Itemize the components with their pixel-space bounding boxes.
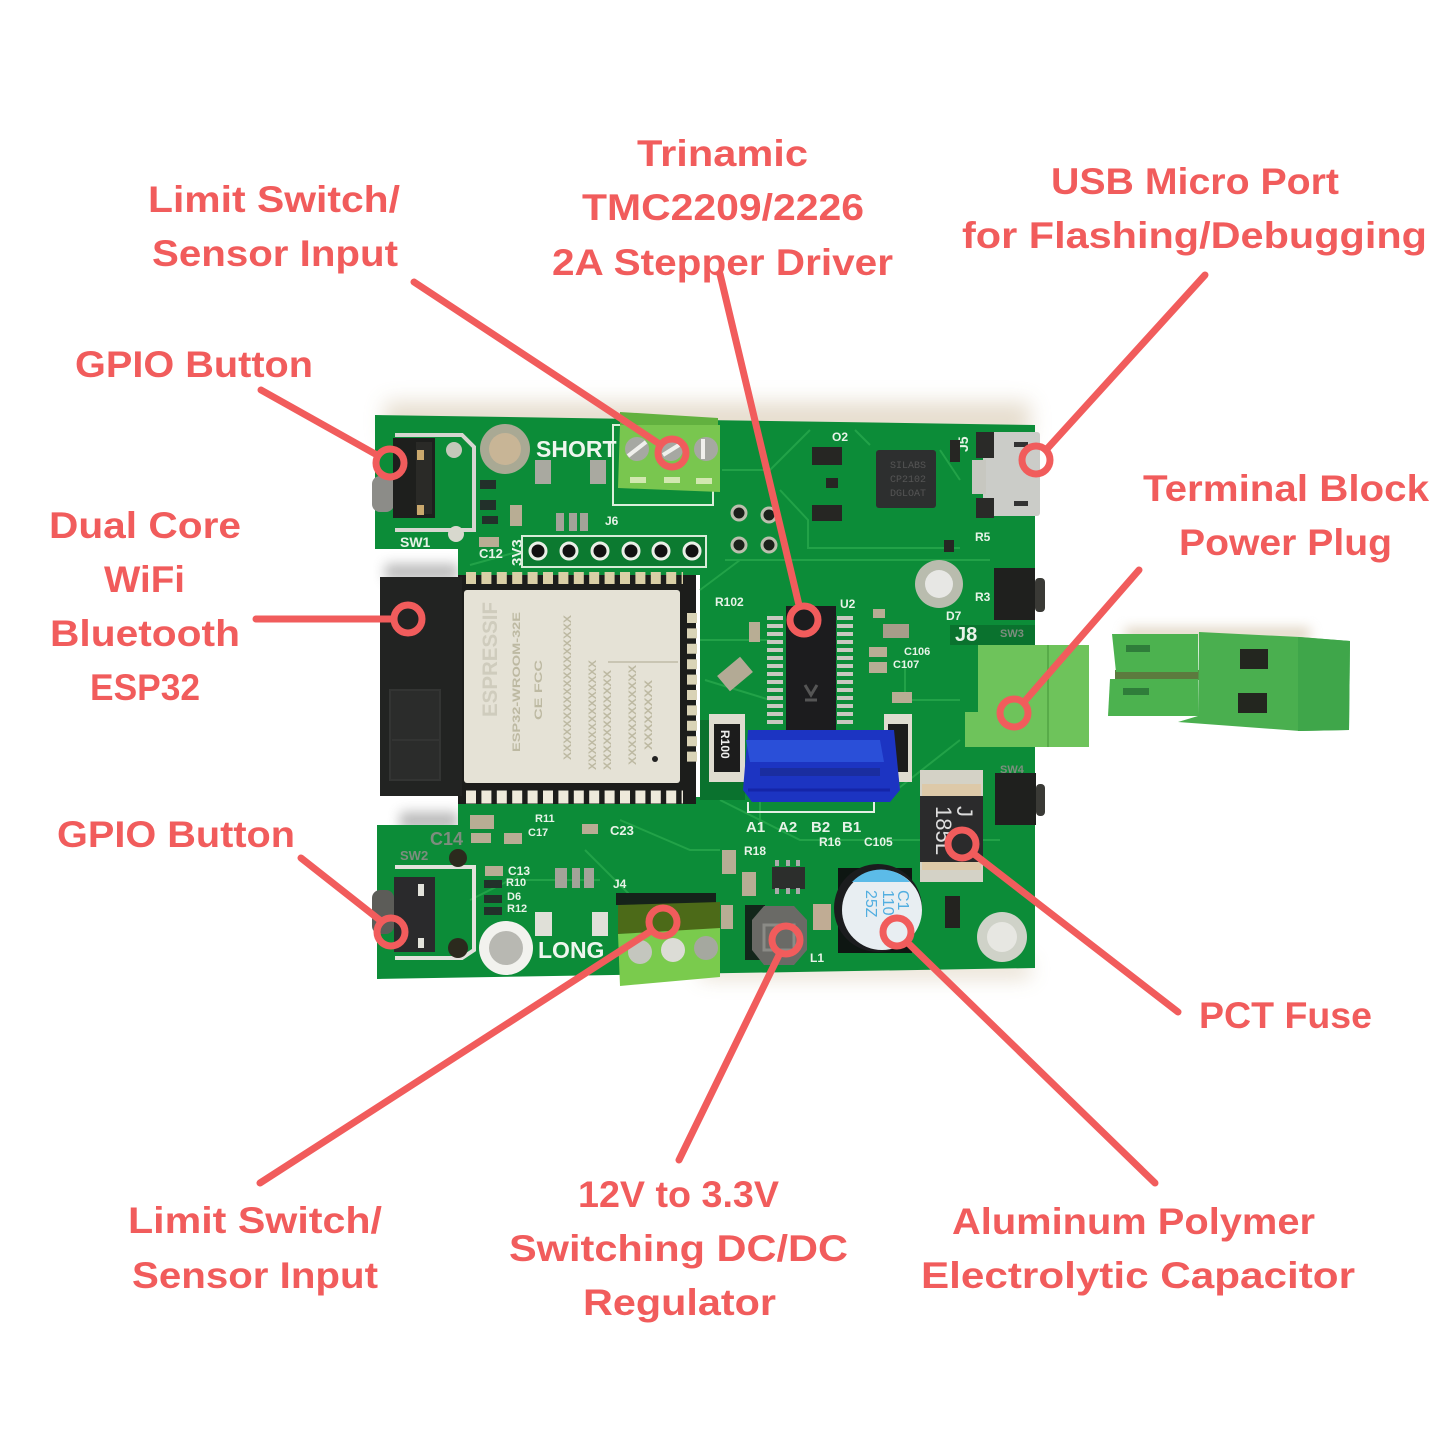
ESP32 module can: XXXXXXXXXXXXXX xyxy=(587,659,599,770)
callout: GPIO Button top xyxy=(75,344,404,477)
small smd parts xyxy=(470,460,608,936)
callout: Trinamic driver xyxy=(552,133,893,634)
callout: USB Micro Port: for Flashing/Debugging xyxy=(962,215,1427,256)
notch shadows xyxy=(385,564,458,830)
ESP32 module can: ESP32-WROOM-32E xyxy=(511,612,523,752)
ESP32 module black base xyxy=(458,575,696,804)
callout: PCT Fuse xyxy=(948,830,1372,1036)
silkscreen labels: R5 xyxy=(975,530,991,544)
silkscreen labels: R11 xyxy=(535,813,555,825)
silkscreen labels: 3V3 xyxy=(509,539,526,566)
QFN USB bridge chip: CP2102 xyxy=(890,475,926,486)
copper traces xyxy=(470,430,1000,905)
silkscreen labels: R3 xyxy=(975,590,991,604)
silkscreen labels: J8 xyxy=(955,624,977,646)
silkscreen labels: R18 xyxy=(744,844,766,858)
silkscreen labels: C107 xyxy=(893,659,919,671)
ESP32 module can: XXXXXXXX xyxy=(643,679,655,750)
silkscreen labels: J4 xyxy=(613,877,627,891)
silkscreen labels: B1 xyxy=(842,819,861,836)
callout: Trinamic driver: 2A Stepper Driver xyxy=(552,242,893,283)
ESP32 antenna area xyxy=(380,577,462,796)
QFN USB bridge chip xyxy=(876,450,936,508)
callout: Limit Switch top: Limit Switch/ xyxy=(148,179,400,220)
silkscreen labels: SW2 xyxy=(400,848,428,863)
callout: Terminal Block: Terminal Block xyxy=(1143,468,1429,509)
callout: Limit Switch bottom xyxy=(128,908,677,1296)
TMC stepper driver chip xyxy=(775,606,845,730)
aluminum capacitor: C1 xyxy=(894,890,911,911)
silkscreen labels: U2 xyxy=(840,597,856,611)
PCT fuse: 185L xyxy=(931,806,956,855)
green screw terminal J8 xyxy=(965,645,1089,747)
silkscreen labels: C23 xyxy=(610,823,634,838)
silkscreen labels: SW4 xyxy=(1000,764,1025,776)
bottom limit switch terminal xyxy=(616,893,720,986)
silkscreen labels: D6 xyxy=(507,891,521,903)
silkscreen labels: SW3 xyxy=(1000,628,1024,640)
PCT fuse: J xyxy=(952,806,977,817)
callout: Capacitor xyxy=(883,918,1355,1296)
callout: Limit Switch bottom: Limit Switch/ xyxy=(128,1200,382,1241)
callout: Dual Core ESP32: ESP32 xyxy=(90,667,200,708)
ESP32 castellated pads xyxy=(466,578,692,797)
silkscreen labels: C12 xyxy=(479,546,503,561)
silkscreen labels: J6 xyxy=(605,514,619,528)
silkscreen labels: C105 xyxy=(864,835,893,849)
callout: Capacitor: Electrolytic Capacitor xyxy=(921,1255,1355,1296)
callout: GPIO Button top: GPIO Button xyxy=(75,344,313,385)
side buttons xyxy=(994,568,1045,825)
silkscreen labels: C106 xyxy=(904,646,930,658)
regulator chips xyxy=(721,850,960,930)
silkscreen labels: C17 xyxy=(528,827,548,839)
silkscreen labels: J5 xyxy=(955,436,971,452)
aluminum capacitor xyxy=(834,864,922,953)
passive components around driver: R100 xyxy=(718,730,732,759)
callout: GPIO Button bottom: GPIO Button xyxy=(57,814,295,855)
transistors xyxy=(812,440,960,552)
QFN USB bridge chip: DGLOAT xyxy=(890,489,926,500)
silkscreen labels: SHORT xyxy=(536,436,616,462)
callout: Terminal Block xyxy=(1000,468,1429,727)
callout: Capacitor: Aluminum Polymer xyxy=(952,1201,1315,1242)
circuit board xyxy=(372,412,1089,986)
mounting hole bottom left xyxy=(479,921,533,975)
blue motor connector xyxy=(743,730,900,802)
PCT fuse xyxy=(920,770,983,882)
silkscreen labels: L1 xyxy=(810,951,824,965)
J3 header xyxy=(732,506,776,552)
silkscreen labels: R10 xyxy=(506,877,526,889)
ESP32 module can: XXXXXXXXXXXX xyxy=(602,669,614,770)
callout: Dual Core ESP32 xyxy=(49,505,422,708)
mounting hole top xyxy=(480,424,530,474)
silkscreen labels: B2 xyxy=(811,819,830,836)
plug shadow xyxy=(1125,628,1310,640)
silkscreen labels: D7 xyxy=(946,609,962,623)
silkscreen labels: A2 xyxy=(778,819,797,836)
callout: USB Micro Port xyxy=(962,161,1427,474)
ESP32 module can: ESPRESSIF xyxy=(479,602,502,717)
ESP32 module can: XXXXXXXXXXXXXXXXXX xyxy=(562,614,574,760)
J2 connector silk outline xyxy=(748,802,874,812)
callout: Trinamic driver: TMC2209/2226 xyxy=(582,187,864,228)
callout: DC/DC Regulator: Switching DC/DC xyxy=(509,1228,848,1269)
detached terminal block plug xyxy=(1108,628,1350,731)
callout: DC/DC Regulator: 12V to 3.3V xyxy=(578,1174,779,1215)
callout: USB Micro Port: USB Micro Port xyxy=(1051,161,1339,202)
silkscreen labels: O2 xyxy=(832,430,848,444)
board shadow xyxy=(385,402,1030,978)
silkscreen labels xyxy=(400,430,1025,965)
dark copper pour xyxy=(700,625,1035,800)
ESP32 module can: XXXXXXXXXXXX xyxy=(627,664,639,765)
top left GPIO button xyxy=(372,435,474,542)
silkscreen labels: R16 xyxy=(819,835,841,849)
ESP32 module can: CE FCC xyxy=(533,660,545,720)
silkscreen labels: C14 xyxy=(430,829,463,849)
silkscreen labels: A1 xyxy=(746,819,765,836)
callout: Dual Core ESP32: WiFi xyxy=(104,559,185,600)
DC/DC inductor xyxy=(745,905,807,965)
callout: GPIO Button bottom xyxy=(57,814,405,946)
callout: Trinamic driver: Trinamic xyxy=(637,133,808,174)
callout: Dual Core ESP32: Bluetooth xyxy=(50,613,240,654)
silkscreen labels: SW1 xyxy=(400,534,431,550)
callout: Limit Switch top xyxy=(148,179,686,467)
QFN USB bridge chip: SILABS xyxy=(890,461,926,472)
callout: Terminal Block: Power Plug xyxy=(1179,522,1392,563)
callout: Limit Switch top: Sensor Input xyxy=(152,233,398,274)
silkscreen labels: LONG xyxy=(538,937,604,963)
board outline xyxy=(375,415,1035,979)
aluminum capacitor: 25Z xyxy=(862,890,879,918)
callout: PCT Fuse: PCT Fuse xyxy=(1199,995,1372,1036)
passive components around driver xyxy=(709,609,912,782)
silkscreen labels: R102 xyxy=(715,595,744,609)
ESP32 module can xyxy=(464,590,680,783)
callout: DC/DC Regulator xyxy=(509,926,848,1323)
top limit switch terminal xyxy=(613,412,720,505)
mounting hole bottom right xyxy=(977,912,1027,962)
mounting hole centre xyxy=(915,560,963,608)
callout: DC/DC Regulator: Regulator xyxy=(583,1282,776,1323)
USB micro port xyxy=(972,432,1040,518)
callout: Limit Switch bottom: Sensor Input xyxy=(132,1255,378,1296)
callout: Dual Core ESP32: Dual Core xyxy=(49,505,241,546)
aluminum capacitor: 110 xyxy=(879,890,896,916)
bottom left GPIO button xyxy=(372,849,474,958)
silkscreen labels: C13 xyxy=(508,864,530,878)
silkscreen labels: R12 xyxy=(507,903,527,915)
header pins 3V3 xyxy=(522,536,706,567)
